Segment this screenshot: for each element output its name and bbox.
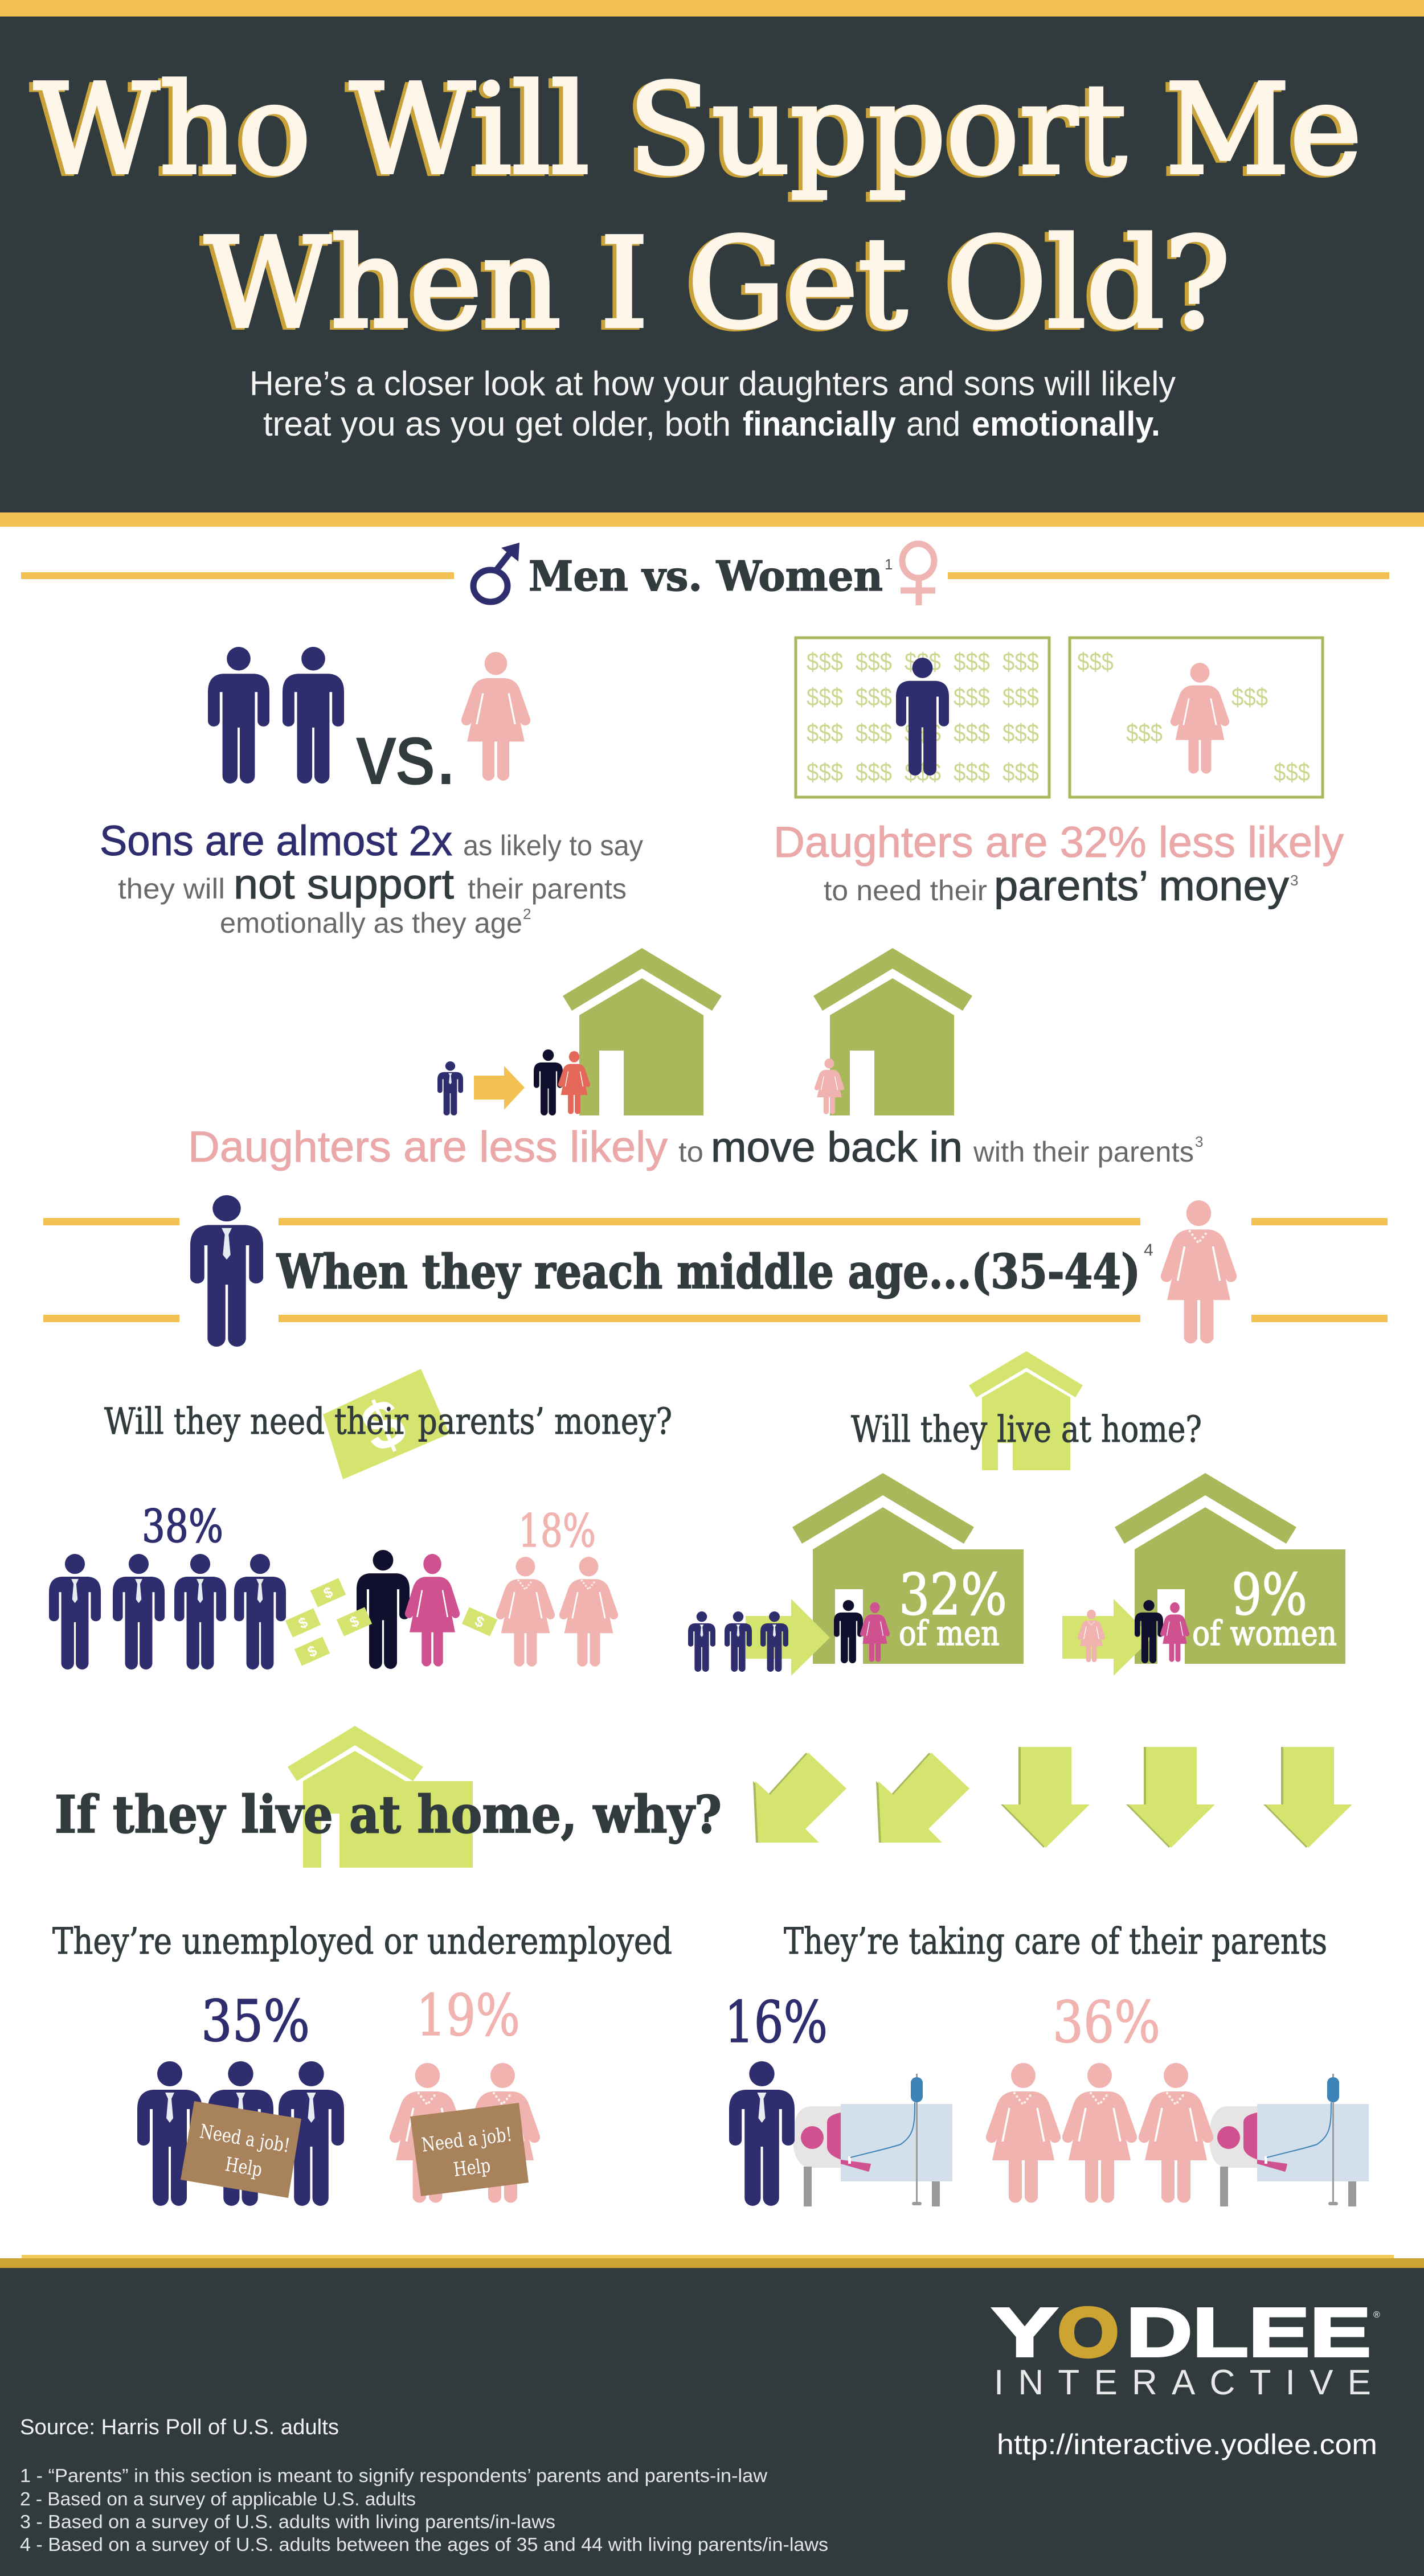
dollar signs: $$$ (1231, 683, 1268, 711)
heading text: If they live at home, why? (55, 1785, 722, 1845)
icon: man in suit (190, 1195, 263, 1347)
footnote marker 1: 1 (885, 556, 893, 573)
icon: light house (288, 1726, 473, 1868)
house: 9% of women (1062, 1473, 1345, 1676)
icon: light house (969, 1351, 1083, 1470)
title: Who Will Support Me (34, 58, 1362, 202)
heading text: Men vs. Women (529, 552, 883, 600)
footnotes (20, 2465, 828, 2555)
sign: men (181, 2101, 301, 2198)
question: Will they live at home? (851, 1409, 1202, 1451)
icon: big dollar bill: $ (351, 1383, 416, 1468)
panel: need parents' money (49, 1369, 672, 1670)
dollar signs: $$$ (1002, 758, 1039, 786)
dollar signs: $$$ (856, 648, 892, 676)
sign: women: Help (452, 2154, 492, 2181)
small dollar bills: $ (347, 1612, 362, 1631)
text block: move back in: 3 (1195, 1133, 1203, 1150)
dollar signs: $$$ (1002, 719, 1039, 747)
illustration: daughter staying away (813, 948, 972, 1115)
dollar signs (1077, 648, 1310, 786)
subtitle: financially (743, 405, 897, 443)
icon: male symbol (473, 543, 519, 602)
section heading: middle age (43, 1195, 1388, 1347)
dollar signs: $$$ (807, 683, 843, 711)
small dollar bills: $ (305, 1642, 320, 1661)
logo: Y (992, 2294, 1058, 2371)
heading: They’re unemployed or underemployed (52, 1921, 672, 1963)
small dollar bills: $ (472, 1612, 487, 1631)
footer panel (0, 2255, 1424, 2576)
dollar signs: $$$ (807, 758, 843, 786)
title: When I Get Old? (200, 214, 1226, 358)
question: Will they need their parents’ money? (104, 1401, 672, 1443)
sign: men: Need a job! (198, 2120, 292, 2157)
icon: hospital bed left (793, 2074, 952, 2206)
dollar signs: $$$ (1002, 648, 1039, 676)
parents (357, 1550, 410, 1669)
subtitle: Here’s a closer look at how your daughters and sons will likely (249, 364, 1176, 403)
dollar signs: $$$ (1077, 648, 1114, 676)
text block: daughters need less money: 3 (1290, 872, 1298, 889)
dollar signs: $$$ (856, 719, 892, 747)
text block: sons emotional support: 2 (523, 905, 531, 922)
logo: O (1058, 2294, 1119, 2371)
dollar signs: $$$ (954, 719, 990, 747)
header panel (0, 0, 1424, 527)
small dollar bills (285, 1578, 497, 1666)
dollar signs: $$$ (954, 758, 990, 786)
footnotes: 4 - Based on a survey of U.S. adults between the ages of 35 and 44 with living parents/in-laws (20, 2534, 828, 2555)
heading text: When they reach middle age...(35-44) (276, 1245, 1140, 1299)
women group (496, 1557, 618, 1667)
text block: sons emotional support: they will (118, 873, 225, 905)
men group (137, 2061, 344, 2206)
text block: sons emotional support: not support (234, 860, 454, 908)
footnotes: 1 - “Parents” in this section is meant to signify respondents’ parents and parents-in-law (20, 2465, 767, 2486)
dollar signs: $$$ (905, 648, 941, 676)
text block: move back in (188, 1123, 1203, 1171)
arrows pointing down to reasons (753, 1747, 1352, 1848)
panel: caregiving (725, 1921, 1369, 2206)
icon: house (563, 948, 722, 1115)
icon: daughter (1171, 663, 1229, 774)
logo (992, 2294, 1380, 2402)
logo: INTERACTIVE (994, 2363, 1371, 2402)
text block: daughters need less money: to need their (824, 875, 987, 906)
subtitle: treat you as you get older, both (263, 405, 731, 443)
sign: women: Need a job! (420, 2123, 514, 2157)
icon: son (896, 658, 949, 776)
subtitle: emotionally. (972, 405, 1160, 443)
icon: big dollar bill (323, 1369, 449, 1479)
text block: daughters need less money (774, 818, 1344, 909)
url: http://interactive.yodlee.com (997, 2429, 1377, 2460)
sign: women (410, 2103, 529, 2196)
house: 9% of women: of women (1192, 1614, 1337, 1654)
title: When I Get Old? (204, 212, 1230, 356)
illustration: son moving back home (437, 948, 722, 1115)
logo: ® (1373, 2310, 1380, 2320)
dollar signs (807, 648, 1039, 786)
women group (986, 2063, 1213, 2203)
section heading: why live at home (55, 1726, 722, 1868)
footnote marker 4: 4 (1144, 1241, 1153, 1260)
panel: sons versus daughters figures: vs. (357, 706, 457, 802)
dollar signs: $$$ (1002, 683, 1039, 711)
text block: daughters need less money: parents’ money (994, 862, 1289, 909)
dollar signs: $$$ (905, 758, 941, 786)
text block: move back in: Daughters are less likely (188, 1123, 668, 1171)
stat: 35%: 35% (201, 1988, 310, 2054)
stat: 19%: 19% (416, 1982, 520, 2049)
source: Source: Harris Poll of U.S. adults (20, 2415, 339, 2439)
panel: unemployed (52, 1921, 672, 2206)
footnotes: 3 - Based on a survey of U.S. adults with living parents/in-laws (20, 2511, 555, 2532)
section heading: men vs women (21, 543, 1389, 605)
logo: DLEE (1126, 2294, 1371, 2371)
house: 32% of men (688, 1473, 1024, 1676)
dollar signs: $$$ (954, 683, 990, 711)
house: 9% of women: 9% (1231, 1561, 1307, 1628)
panel: sons versus daughters figures (208, 647, 530, 802)
sign: men: Help (223, 2153, 264, 2181)
text block: sons emotional support: Sons are almost 2x (100, 817, 452, 864)
text block: move back in: with their parents (973, 1136, 1194, 1168)
dollar signs: $$$ (1274, 758, 1310, 786)
text block: sons emotional support (100, 817, 643, 939)
house: 32% of men: of men (899, 1614, 1000, 1654)
dollar signs: $$$ (954, 648, 990, 676)
text block: move back in: to (678, 1136, 703, 1168)
icon: woman with necklace (1161, 1200, 1237, 1343)
stat: 38%: 38% (142, 1500, 223, 1553)
panel: daughter money box (1070, 638, 1323, 797)
icon: man in suit (729, 2061, 795, 2206)
panel: son money box (796, 638, 1049, 797)
icon: female symbol (901, 544, 935, 605)
text block: sons emotional support: their parents (468, 873, 627, 905)
subtitle: and (906, 405, 960, 443)
dollar signs: $$$ (1126, 719, 1163, 747)
small dollar bills: $ (296, 1613, 310, 1632)
dollar signs: $$$ (905, 719, 941, 747)
arrow (474, 1066, 525, 1110)
text block: move back in: move back in (711, 1123, 963, 1171)
icon: hospital bed right (1209, 2074, 1369, 2206)
stat: 18%: 18% (518, 1504, 596, 1557)
title (30, 58, 1362, 358)
subtitle (249, 364, 1176, 443)
women group (390, 2063, 540, 2203)
panel: live at home (688, 1351, 1345, 1676)
dollar signs: $$$ (807, 719, 843, 747)
text block: daughters need less money: Daughters are 32% less likely (774, 818, 1344, 867)
dollar signs: $$$ (807, 648, 843, 676)
stat: 36%: 36% (1053, 1989, 1160, 2056)
text block: sons emotional support: as likely to say (463, 830, 643, 862)
text block: sons emotional support: emotionally as they age (220, 907, 522, 939)
dollar signs: $$$ (856, 758, 892, 786)
icon: house (813, 948, 972, 1115)
men group (49, 1554, 286, 1670)
house: 32% of men: 32% (899, 1561, 1007, 1628)
small dollar bills: $ (321, 1583, 335, 1602)
stat: 16%: 16% (725, 1989, 828, 2056)
title: Who Will Support Me (30, 60, 1358, 204)
dollar signs: $$$ (856, 683, 892, 711)
footnotes: 2 - Based on a survey of applicable U.S. adults (20, 2488, 416, 2509)
